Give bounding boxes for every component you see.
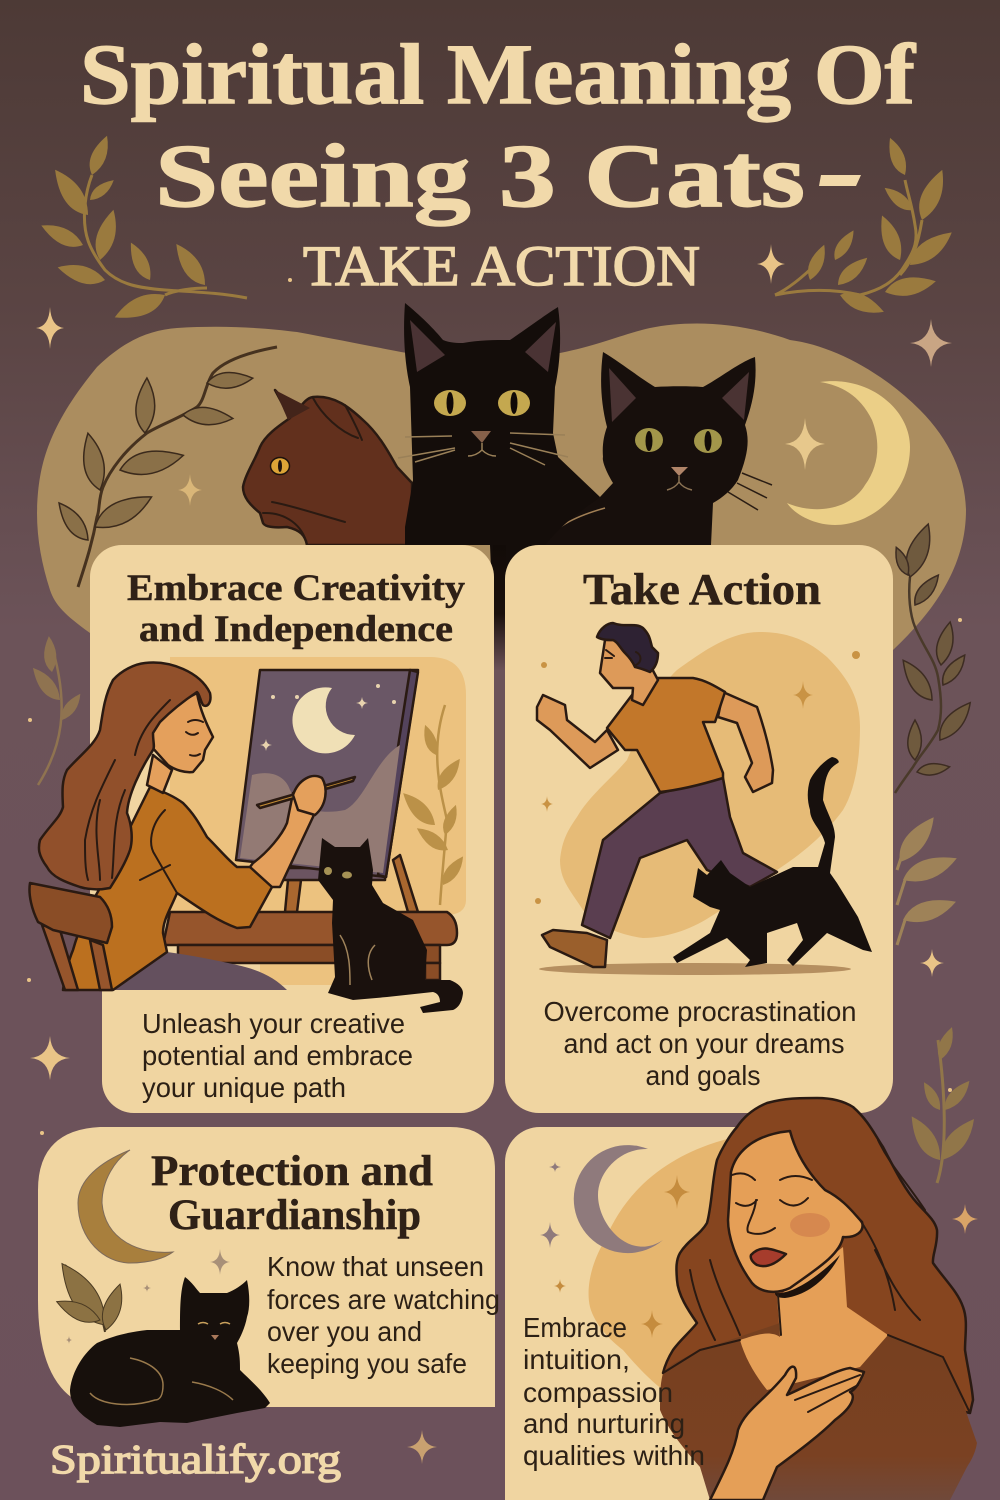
panel background bbox=[38, 1127, 495, 1407]
title bbox=[80, 26, 916, 298]
body text: Overcome procrastination bbox=[544, 996, 856, 1027]
body text bbox=[142, 1008, 413, 1103]
walking black cat bbox=[673, 757, 872, 967]
body text: potential and embrace bbox=[142, 1040, 413, 1071]
middle black cat bbox=[398, 303, 600, 640]
cat backdrop blob bbox=[37, 324, 966, 660]
star near moon bbox=[785, 418, 825, 470]
stars bbox=[66, 1249, 230, 1344]
panel: take action bbox=[505, 545, 893, 1113]
running man bbox=[537, 623, 777, 967]
heading bbox=[127, 568, 466, 650]
body text bbox=[267, 1251, 500, 1379]
panel background bbox=[505, 545, 893, 1113]
body text: forces are watching bbox=[267, 1284, 500, 1315]
body text: Embrace bbox=[523, 1312, 627, 1343]
heading: and Independence bbox=[139, 609, 453, 650]
chair bbox=[29, 883, 112, 990]
right laurel bbox=[775, 136, 957, 319]
glow blob bbox=[589, 1137, 780, 1395]
heading: Guardianship bbox=[168, 1192, 421, 1239]
cat backdrop sprig bbox=[52, 347, 277, 587]
body text: Unleash your creative bbox=[142, 1008, 405, 1039]
title: TAKE ACTION bbox=[303, 235, 700, 298]
lying black cat bbox=[70, 1277, 270, 1427]
faded leaves right side bbox=[892, 811, 960, 945]
sprig bbox=[51, 1257, 127, 1333]
body text: Know that unseen bbox=[267, 1251, 484, 1282]
body text: compassion bbox=[523, 1377, 673, 1408]
body text: and act on your dreams bbox=[564, 1028, 844, 1059]
meditating woman bbox=[660, 1098, 977, 1500]
crescent moon top right bbox=[787, 381, 910, 525]
right black cat bbox=[543, 352, 772, 545]
title: Seeing 3 Cats bbox=[155, 127, 805, 226]
left side sprig bbox=[27, 636, 85, 785]
brown cat bbox=[243, 390, 412, 545]
background stars bbox=[27, 244, 978, 1464]
body text: over you and bbox=[267, 1316, 422, 1347]
ground shadow bbox=[539, 963, 851, 975]
body text bbox=[523, 1312, 705, 1471]
body text: qualities within bbox=[523, 1440, 705, 1471]
heading bbox=[151, 1148, 433, 1239]
star in backdrop bbox=[178, 474, 202, 506]
right side sprig bbox=[891, 521, 976, 793]
body text: and goals bbox=[646, 1060, 760, 1091]
stars bbox=[540, 1162, 690, 1338]
heading: Embrace Creativity bbox=[127, 568, 466, 609]
crescent moon bbox=[78, 1150, 173, 1263]
sitting black cat bbox=[318, 838, 463, 1013]
painting woman bbox=[39, 663, 355, 990]
painting easel bbox=[236, 670, 418, 912]
illustration blob bbox=[560, 632, 860, 938]
body text bbox=[544, 996, 856, 1091]
body text: your unique path bbox=[142, 1072, 346, 1103]
crescent moon bbox=[574, 1145, 663, 1253]
table bbox=[163, 912, 457, 980]
sprig on illustration bbox=[397, 705, 468, 905]
panel: protection and guardianship bbox=[38, 1127, 500, 1427]
title: Spiritual Meaning Of bbox=[80, 26, 916, 122]
body text: and nurturing bbox=[523, 1408, 685, 1439]
dark gap strip between panels bbox=[493, 545, 506, 670]
lower right sprig bbox=[904, 1025, 981, 1183]
panel: embrace creativity bbox=[29, 545, 494, 1113]
body text: keeping you safe bbox=[267, 1348, 467, 1379]
heading: Take Action bbox=[583, 565, 821, 614]
panel background bbox=[90, 545, 494, 1113]
panel: intuition bbox=[505, 1098, 977, 1500]
stars bbox=[535, 651, 860, 904]
heading: Protection and bbox=[151, 1148, 433, 1195]
left laurel bbox=[38, 133, 247, 326]
body text: intuition, bbox=[523, 1344, 630, 1375]
panel background bbox=[505, 1127, 780, 1500]
illustration backdrop bbox=[170, 657, 466, 985]
site name: Spiritualify.org bbox=[50, 1436, 341, 1482]
